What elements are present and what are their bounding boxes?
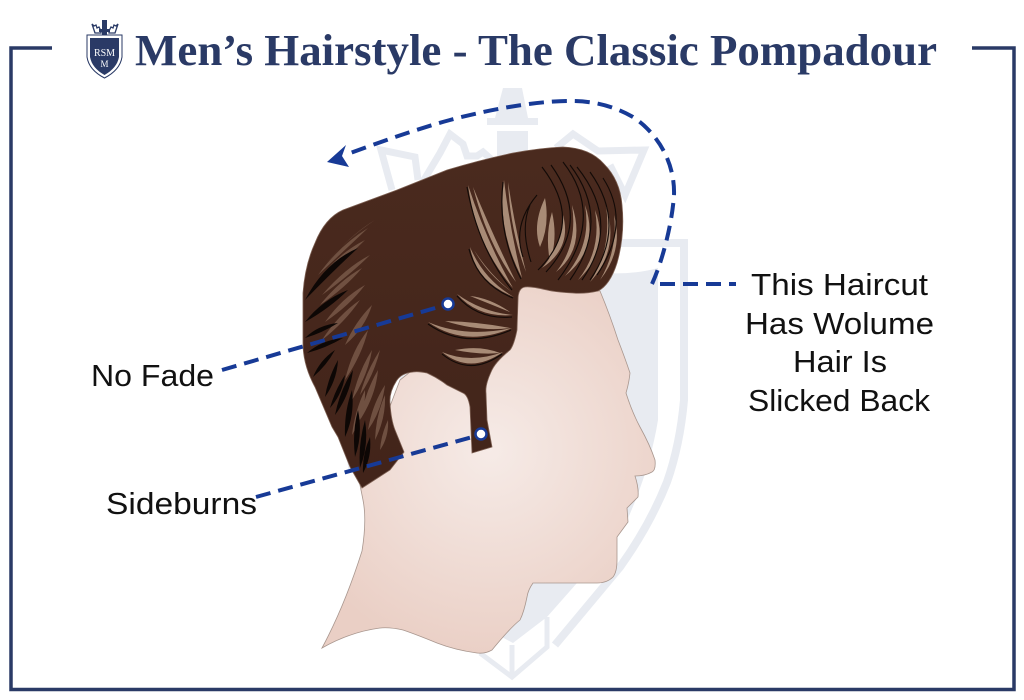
arrow: volume direction <box>327 101 674 284</box>
label: haircut description: This Haircut <box>751 267 928 302</box>
logo: crest shield: M <box>100 59 109 69</box>
front hair lines dark <box>428 162 616 366</box>
watermark shield <box>345 88 684 677</box>
face and neck <box>322 285 655 653</box>
label: haircut description <box>745 267 934 418</box>
leader line: sideburns <box>256 428 486 497</box>
back hair strands black <box>305 248 370 473</box>
label: haircut description: Hair Is <box>793 344 887 379</box>
leader line: volume label <box>660 282 736 286</box>
back hair strands tan <box>315 220 388 450</box>
label: haircut description: Slicked Back <box>748 383 931 418</box>
label: no fade: No Fade <box>91 358 214 393</box>
hair mass <box>303 147 623 488</box>
front hair strands tan <box>428 180 617 364</box>
label: sideburns: Sideburns <box>106 486 257 521</box>
illustration: head with pompadour <box>303 147 655 653</box>
title: Men’s Hairstyle - The Classic Pompadour <box>135 26 937 75</box>
leader line: no fade <box>222 298 454 370</box>
label: haircut description: Has Wolume <box>745 306 934 341</box>
logo: crest shield <box>87 20 122 78</box>
logo: crest shield: RSM <box>94 48 115 59</box>
